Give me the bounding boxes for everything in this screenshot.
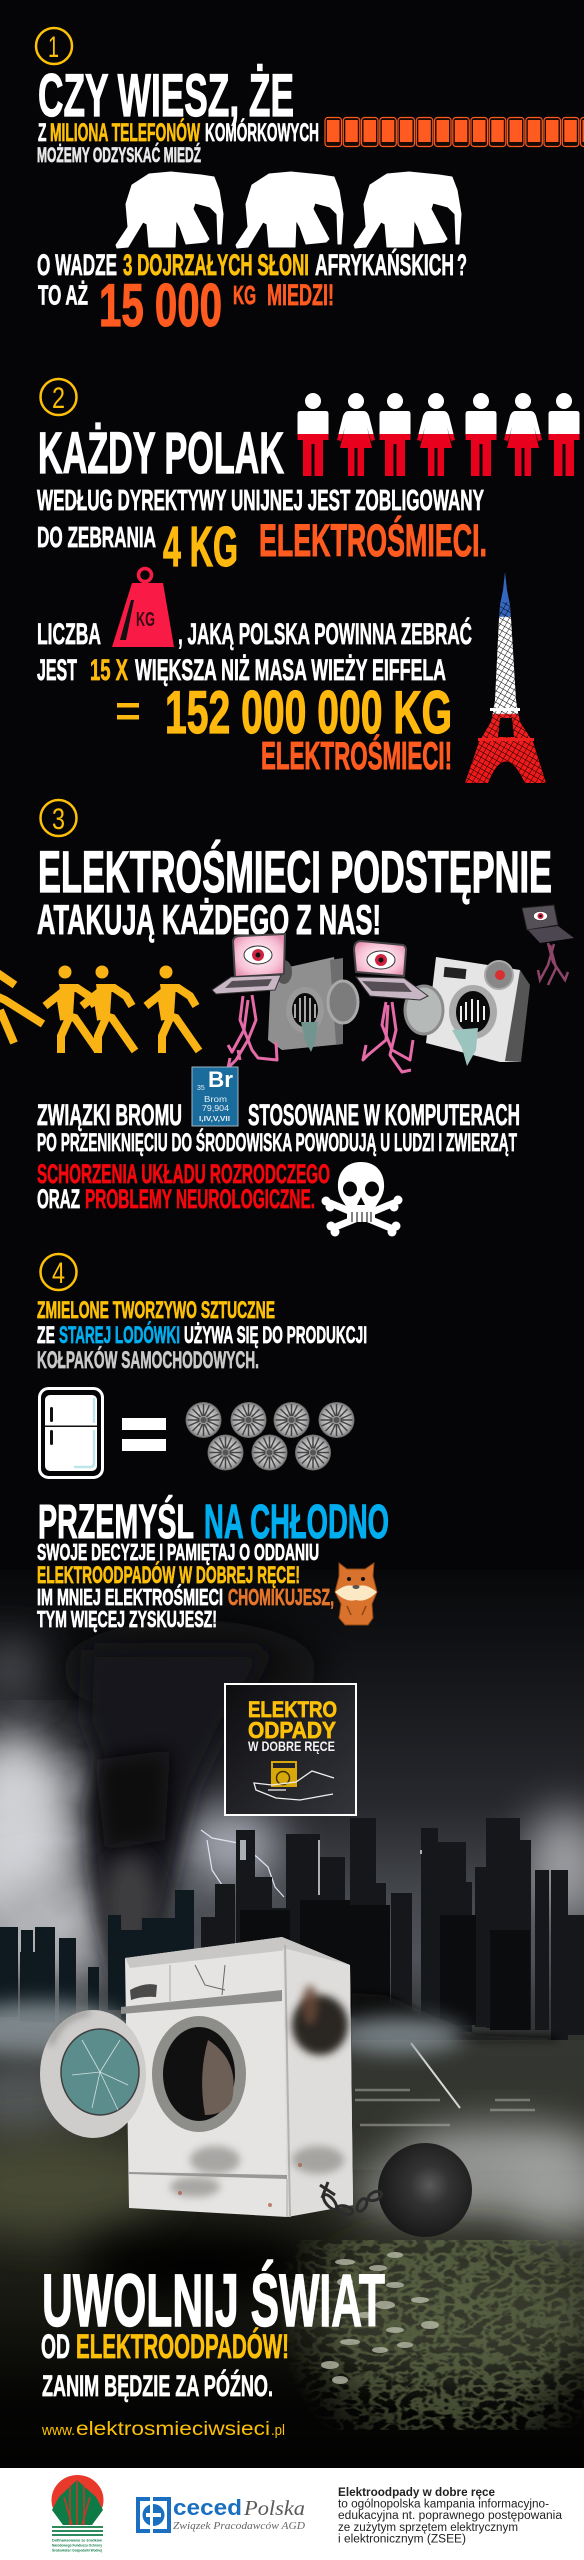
illustration: grey washing machine monster with laptop <box>212 934 358 1068</box>
panel: call to action <box>41 2259 385 2440</box>
text: 15 000 kg miedzi: MIEDZI! <box>267 279 334 312</box>
text: 15 000 kg miedzi: TO AŻ <box>38 280 88 310</box>
pale gravel streak <box>321 2252 439 2384</box>
text: 4 kg elektrośmieci <box>37 515 487 579</box>
heading: przemyśl na chłodno: PRZEMYŚL <box>38 1494 194 1549</box>
text: im mniej chomikujesz: IM MNIEJ ELEKTROŚMIECI <box>37 1583 223 1610</box>
element card: bromine: Br <box>208 1067 233 1092</box>
text: liczba, jaką polska powinna zebrać: LICZBA <box>37 618 101 651</box>
text: od elektroodpadów <box>41 2328 289 2366</box>
text: możemy odzyskać miedź: MOŻEMY ODZYSKAĆ MIEDŹ <box>37 143 201 167</box>
footer: white partners band <box>0 2468 584 2560</box>
number badge 2 <box>40 379 76 415</box>
icon: red weight: KG <box>136 609 155 631</box>
icon row: people in polish flag colours <box>298 393 580 476</box>
logo: ceced polska: Polska <box>243 2496 305 2520</box>
text: 15 x większa: JEST <box>37 654 77 687</box>
panel: section 4 fridge <box>37 1254 389 1632</box>
text: starej lodówki: STAREJ LODÓWKI <box>59 1321 180 1349</box>
text: weight of three elephants: AFRYKAŃSKICH <box>315 248 454 282</box>
element card: bromine: 79,904 <box>202 1104 230 1113</box>
icon: hamster <box>335 1563 377 1625</box>
logo: ceced polska: ceced <box>173 2495 242 2520</box>
text: starej lodówki: UŻYWA SIĘ DO PRODUKCJI <box>184 1322 367 1349</box>
panel: fact 1 copper <box>36 28 584 339</box>
text: phones line: KOMÓRKOWYCH <box>205 117 319 147</box>
text: 15 000 kg miedzi: KG <box>233 280 256 310</box>
element card: bromine <box>192 1067 238 1126</box>
text: 15 000 kg miedzi: 15 000 <box>99 272 222 339</box>
icon: fridge <box>40 1388 102 1478</box>
number badge 2: 2 <box>52 382 65 415</box>
debris pile <box>352 1993 558 2042</box>
logo card: elektroodpady w dobre ręce: ELEKTRO <box>248 1697 337 1722</box>
text: od elektroodpadów: OD <box>41 2328 70 2366</box>
cobblestones <box>275 2240 584 2430</box>
logo: ceced polska <box>136 2495 305 2533</box>
text: 4 kg elektrośmieci: DO ZEBRANIA <box>37 522 156 554</box>
logo: nfosigw: Dofinansowano ze środków <box>52 2538 102 2542</box>
icon row: phones <box>325 118 584 146</box>
icon: washer in hand <box>254 1761 334 1800</box>
website url: .pl <box>271 2422 285 2439</box>
text: campaign description: edukacyjna nt. poprawnego postępowania <box>338 2510 563 2522</box>
text: związki bromu <box>37 1099 520 1132</box>
illustration: ruined city skyline <box>0 1818 584 2040</box>
text: health effects: SCHORZENIA UKŁADU ROZRODCZEGO <box>37 1159 330 1189</box>
logo card: elektroodpady w dobre ręce: ODPADY <box>248 1717 336 1743</box>
text: weight of three elephants: ? <box>457 249 467 282</box>
text: 4 kg elektrośmieci: 4 KG <box>163 515 238 579</box>
logo card: elektroodpady w dobre ręce: W DOBRE RĘCE <box>248 1738 335 1754</box>
text: swoje decyzje: SWOJE DECYZJE I PAMIĘTAJ O ODDANIU <box>37 1539 319 1565</box>
scene: storm city background <box>0 1570 584 2470</box>
text: weight of three elephants: 3 DOJRZAŁYCH SŁONI <box>123 249 309 282</box>
lightning bolt <box>201 1830 284 1897</box>
number badge 1: 1 <box>48 31 59 64</box>
text: campaign description: ze zużytym sprzętem elektrycznym <box>338 2522 518 2534</box>
text: zmielone tworzywo: ZMIELONE TWORZYWO SZTUCZNE <box>37 1297 275 1324</box>
panel: fact 2 obligation <box>37 379 580 783</box>
text: 15 x większa: 15 X <box>90 654 128 687</box>
illustration: white washing machine monster with laptop <box>354 941 530 1072</box>
text: weight of three elephants: O WADZE <box>37 249 117 282</box>
element card: bromine: Brom <box>204 1095 227 1104</box>
text: starej lodówki: ZE <box>37 1322 55 1349</box>
element card: bromine: I,IV,V,VII <box>199 1116 230 1123</box>
icon: red weight <box>112 568 174 647</box>
text: phones line: MILIONA TELEFONÓW <box>50 117 200 147</box>
text: campaign description: Elektroodpady w dobre ręce <box>338 2487 495 2499</box>
icon: ball and chain <box>320 2143 472 2237</box>
icon: eiffel tower <box>465 572 546 783</box>
website url: www. <box>41 2422 75 2439</box>
number badge 4: 4 <box>52 1257 65 1290</box>
icon row: fleeing people <box>0 966 199 1053</box>
element card: bromine: 35 <box>197 1085 205 1092</box>
clouds: left bright storm <box>0 1640 584 2000</box>
logo card: elektroodpady w dobre ręce <box>225 1684 356 1815</box>
heading: każdy polak: KAŻDY POLAK <box>38 421 284 486</box>
icon: skull and crossbones <box>322 1162 402 1236</box>
text: campaign description: to ogólnopolska kampania informacyjno- <box>338 2498 549 2510</box>
illustration: tornado <box>60 1620 320 1975</box>
website url <box>41 2419 285 2440</box>
text: starej lodówki <box>37 1321 367 1349</box>
number badge 3 <box>40 800 76 836</box>
illustration: wrecked washing machine <box>40 1937 353 2217</box>
text: liczba, jaką polska powinna zebrać <box>37 617 472 651</box>
illustration: small dark laptop with tentacles <box>522 905 574 985</box>
text: elektroodpadów w dobrej ręce: ELEKTROODPADÓW W DOBREJ RĘCE! <box>37 1561 300 1589</box>
text: health effects <box>37 1159 330 1214</box>
text: zanim będzie za późno: ZANIM BĘDZIE ZA PÓŹNO. <box>42 2369 273 2403</box>
icon row: elephants <box>116 172 461 248</box>
text: campaign description: i elektronicznym (ZSEE) <box>338 2534 466 2546</box>
equals sign <box>117 703 139 720</box>
road with white line <box>352 2040 560 2170</box>
website url: elektrosmieciwsieci <box>76 2419 270 2440</box>
equals sign <box>122 1418 166 1451</box>
logo: nfosigw: Narodowego Funduszu Ochrony <box>52 2544 102 2548</box>
mist <box>0 2002 584 2380</box>
heading: czy wiesz: CZY WIESZ, ŻE <box>38 62 294 129</box>
number badge 1 <box>36 28 72 64</box>
text: od elektroodpadów: ELEKTROODPADÓW! <box>76 2328 289 2366</box>
text: phones line: Z <box>38 119 46 147</box>
text: im mniej chomikujesz: CHOMIKUJESZ, <box>228 1584 334 1610</box>
text: 15 x większa <box>37 654 446 687</box>
logo: nfosigw: Środowiska i Gospodarki Wodnej <box>52 2548 102 2552</box>
text: health effects: ORAZ <box>37 1184 80 1214</box>
panel: fact 3 hidden danger <box>0 800 574 1236</box>
text: campaign description <box>338 2487 563 2546</box>
number badge 3: 3 <box>52 803 65 836</box>
icon group: hubcaps <box>186 1402 354 1470</box>
text: 15 000 kg miedzi <box>38 272 334 339</box>
text: związki bromu: ZWIĄZKI BROMU <box>37 1099 182 1132</box>
text: health effects: PROBLEMY NEUROLOGICZNE. <box>85 1184 315 1214</box>
logo: nfosigw <box>52 2475 104 2552</box>
number badge 4 <box>40 1254 76 1290</box>
text: kołpaków samochodowych: KOŁPAKÓW SAMOCHODOWYCH. <box>37 1346 259 1374</box>
logo: ceced polska: Związek Pracodawców AGD <box>173 2520 305 2532</box>
heading: przemyśl na chłodno: NA CHŁODNO <box>204 1496 389 1549</box>
text: tym więcej zyskujesz: TYM WIĘCEJ ZYSKUJESZ! <box>37 1606 217 1632</box>
